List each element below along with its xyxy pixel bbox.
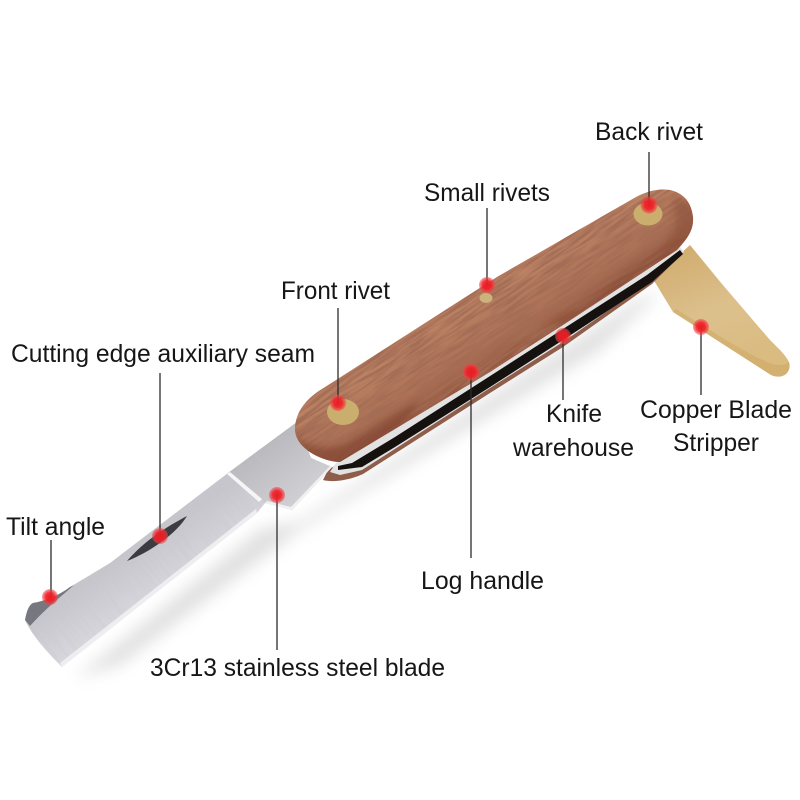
- leader lines: [51, 152, 701, 650]
- log handle: [295, 190, 694, 462]
- label: Front rivet: Front rivet: [281, 277, 390, 305]
- label: Back rivet: Back rivet: [595, 118, 703, 146]
- red marker dots: [42, 196, 709, 605]
- back handle scale: [323, 252, 684, 481]
- soft shadow under knife: [75, 292, 660, 678]
- label: Cutting edge auxiliary seam: Cutting edge auxiliary seam: [11, 340, 315, 368]
- stainless steel blade: [25, 423, 332, 667]
- white liner band: [330, 247, 684, 475]
- label: Small rivets: Small rivets: [424, 179, 550, 207]
- cutting edge auxiliary seam: [127, 516, 187, 561]
- darkened handle ends: [290, 200, 700, 468]
- heel lower edge: [265, 466, 332, 510]
- blade heel: [228, 422, 332, 510]
- label: Tilt angle: Tilt angle: [6, 513, 105, 541]
- label: Copper Blade Stripper: [640, 396, 792, 457]
- label: 3Cr13 stainless steel blade: 3Cr13 stainless steel blade: [150, 654, 445, 682]
- label: Knife warehouse: Knife: [546, 400, 602, 428]
- label: Knife warehouse: [512, 400, 634, 462]
- knife illustration: [25, 190, 790, 667]
- front rivet: [327, 399, 359, 425]
- back rivet: [634, 202, 662, 226]
- knife warehouse slot: [338, 250, 683, 470]
- label: Knife warehouse: warehouse: [512, 434, 634, 462]
- label: Copper Blade Stripper: Stripper: [673, 429, 759, 457]
- brushed steel texture: [3, 428, 303, 690]
- small rivet: [480, 293, 492, 303]
- label: Log handle: Log handle: [421, 567, 544, 595]
- cutting edge highlight: [60, 509, 257, 667]
- tilt angle bevel: [25, 585, 74, 626]
- blade shoulder highlight: [227, 472, 262, 502]
- copper blade stripper: [653, 245, 790, 377]
- label: Copper Blade Stripper: Copper Blade: [640, 396, 792, 424]
